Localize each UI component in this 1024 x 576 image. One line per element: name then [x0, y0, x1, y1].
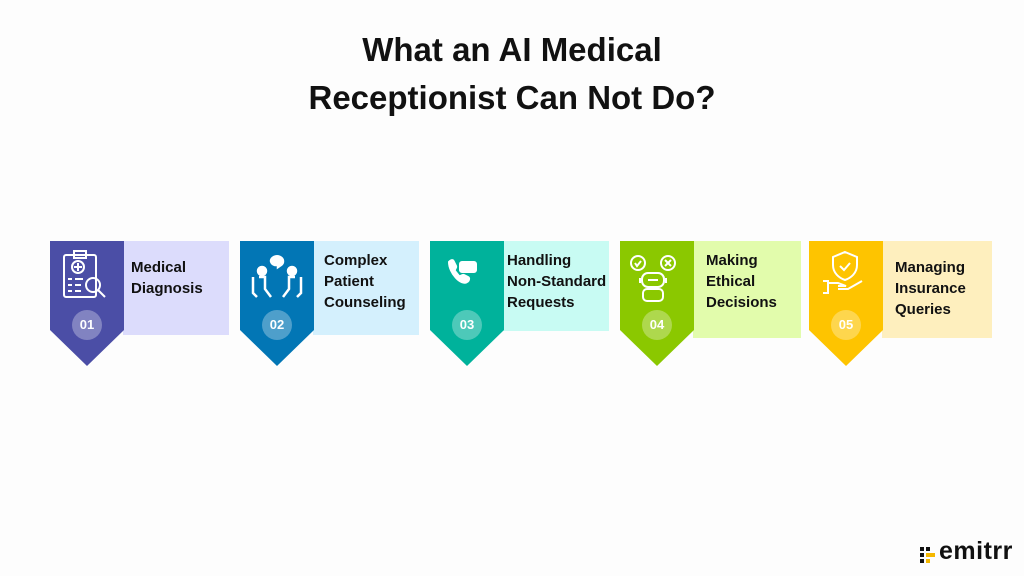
- icon: phone with voice: [448, 259, 477, 284]
- label: [895, 259, 966, 318]
- label: Medical: [131, 259, 186, 276]
- number 05: 05: [839, 317, 853, 332]
- label: [706, 252, 777, 311]
- label: Making: [706, 252, 758, 269]
- icon: people talking: [252, 255, 302, 298]
- pointer banner: [240, 241, 314, 366]
- light box: [313, 241, 419, 335]
- title: Receptionist Can Not Do?: [308, 79, 716, 116]
- pointer banner: [620, 241, 694, 366]
- title: [308, 31, 716, 116]
- panel: ethical decisions: [620, 241, 801, 366]
- label: Insurance: [895, 280, 966, 297]
- number 04: [642, 310, 672, 340]
- label: Diagnosis: [131, 280, 203, 297]
- label: [324, 252, 406, 311]
- label: Handling: [507, 252, 571, 269]
- light box: [123, 241, 229, 335]
- number 02: [262, 310, 292, 340]
- panel: medical diagnosis: [50, 241, 229, 366]
- number 01: [72, 310, 102, 340]
- panel: insurance queries: [809, 241, 992, 366]
- panel: non-standard requests: [430, 241, 609, 366]
- number 04: 04: [650, 317, 664, 332]
- pointer banner: [809, 241, 883, 366]
- icon: clipboard magnifier: [63, 250, 106, 298]
- number 03: 03: [460, 317, 474, 332]
- icon: shield in hand: [823, 250, 862, 294]
- label: Non-Standard: [507, 273, 606, 290]
- panel: complex patient counseling: [240, 241, 419, 366]
- label: Complex: [324, 252, 387, 269]
- icon: robot with check/cross: [630, 255, 676, 302]
- light box: [693, 241, 801, 338]
- label: Managing: [895, 259, 965, 276]
- number 01: 01: [80, 317, 94, 332]
- light box: [882, 241, 992, 338]
- label: Counseling: [324, 294, 406, 311]
- number 05: [831, 310, 861, 340]
- logo: emitrr: emitrr: [939, 537, 1013, 565]
- label: Patient: [324, 273, 374, 290]
- label: [131, 259, 203, 297]
- pointer banner: [430, 241, 504, 366]
- light box: [503, 241, 609, 331]
- number 03: [452, 310, 482, 340]
- label: [507, 252, 606, 311]
- pointer banner: [50, 241, 124, 366]
- label: Decisions: [706, 294, 777, 311]
- label: Ethical: [706, 273, 755, 290]
- title: What an AI Medical: [362, 31, 662, 68]
- number 02: 02: [270, 317, 284, 332]
- label: Queries: [895, 301, 951, 318]
- label: Requests: [507, 294, 575, 311]
